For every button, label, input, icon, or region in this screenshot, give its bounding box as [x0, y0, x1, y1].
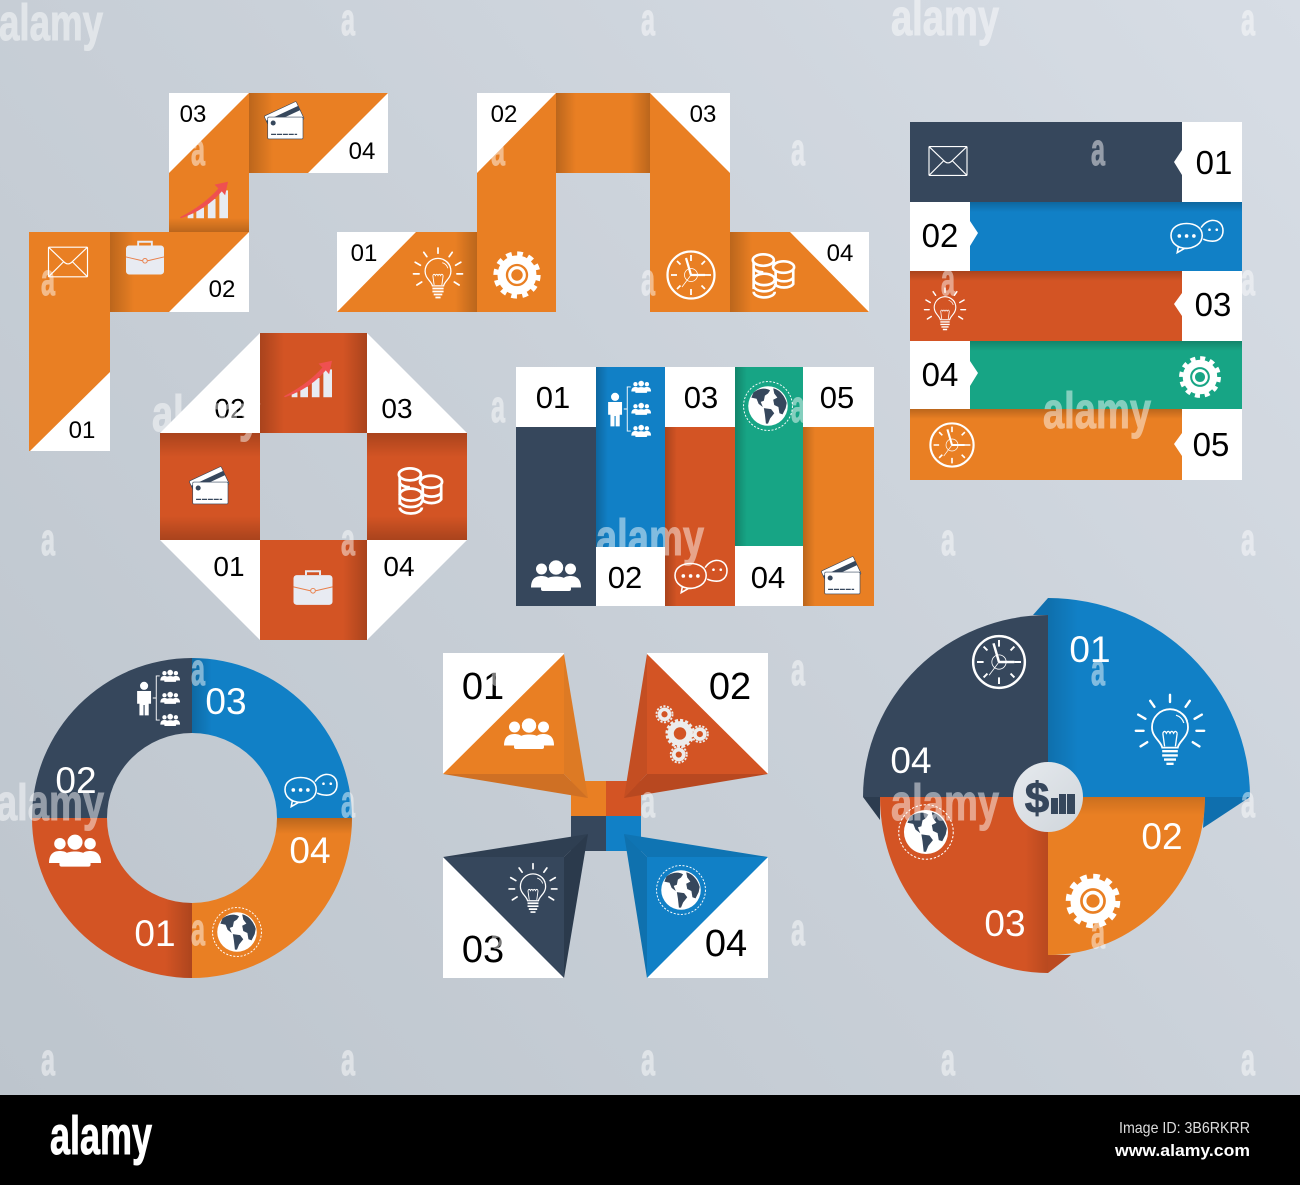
watermarks: a — [341, 514, 356, 565]
footer bar — [0, 1095, 1300, 1185]
watermarks: a — [1091, 644, 1106, 695]
panel: folded pie — [863, 598, 1250, 973]
icon: globe — [657, 866, 705, 914]
icon: clock — [930, 423, 974, 467]
labels: 01 — [462, 666, 504, 708]
icon: chat — [675, 560, 727, 593]
quadrant blue — [192, 658, 352, 818]
labels — [213, 393, 415, 582]
column 05: 05 — [820, 380, 854, 415]
segment 03: 03 — [180, 101, 206, 128]
watermarks: a — [791, 124, 806, 175]
watermarks: a — [41, 254, 56, 305]
icon: briefcase — [294, 571, 332, 605]
triangle blue — [624, 834, 768, 978]
icon: envelope — [48, 247, 88, 277]
centre blocks — [571, 781, 641, 851]
panel: donut chart — [32, 658, 352, 978]
icon: clock — [668, 252, 714, 298]
watermarks: a — [491, 907, 506, 958]
left square — [160, 433, 260, 540]
arch top — [556, 93, 650, 173]
quadrant orange — [1048, 797, 1205, 955]
labels: 03 — [205, 681, 247, 722]
icon: credit cards — [264, 101, 304, 139]
segment 03 — [650, 93, 730, 312]
segment 01: 01 — [69, 417, 95, 444]
column 02 — [596, 367, 665, 606]
bar 04: 04 — [922, 356, 958, 393]
icon: clock — [973, 636, 1025, 688]
watermarks: a — [1241, 514, 1256, 565]
watermarks: a — [1091, 907, 1106, 958]
segment 01 — [337, 232, 477, 312]
segment 04: 04 — [349, 138, 375, 165]
labels: 02 — [709, 666, 751, 708]
icon: gear — [496, 254, 538, 296]
icon: chat — [285, 774, 337, 807]
column 05 — [803, 367, 874, 606]
centre dollar badge — [1013, 762, 1083, 832]
watermarks: a — [491, 381, 506, 432]
centre dollar badge: $ — [1025, 774, 1049, 823]
labels — [462, 666, 751, 971]
icon: globe — [899, 805, 953, 859]
labels: 01 — [1069, 629, 1111, 670]
icon: gears — [656, 706, 708, 763]
labels — [55, 681, 331, 954]
watermarks: alamy — [0, 774, 104, 831]
segment 03 — [169, 93, 249, 232]
icon: briefcase — [126, 242, 164, 274]
icon: globe — [213, 908, 261, 956]
triangle orange — [443, 654, 588, 798]
quadrant navy — [863, 615, 1048, 797]
column 01 — [516, 367, 596, 606]
bar 03 — [910, 271, 1242, 341]
quadrant red — [880, 797, 1048, 973]
watermarks: a — [491, 124, 506, 175]
segment 02 — [110, 232, 249, 312]
right square — [367, 433, 467, 540]
icon: people — [531, 560, 581, 591]
icon: gear — [1068, 876, 1118, 926]
segment 04 — [730, 232, 869, 312]
footer logo: alamy — [50, 1106, 152, 1166]
watermarks: a — [341, 1034, 356, 1085]
icon: credit cards — [821, 556, 861, 594]
panel: five bars — [910, 122, 1242, 480]
labels: 01 — [213, 551, 245, 582]
watermarks: alamy — [1043, 382, 1151, 439]
bar 02: 02 — [922, 217, 958, 254]
watermarks: a — [791, 644, 806, 695]
watermarks: a — [791, 904, 806, 955]
panel: arch ribbon — [337, 93, 869, 312]
watermarks: a — [191, 904, 206, 955]
segment 04: 04 — [827, 240, 853, 267]
watermarks: a — [491, 644, 506, 695]
column 03: 03 — [684, 380, 718, 415]
watermarks: a — [641, 1034, 656, 1085]
fold shadows — [863, 598, 1250, 973]
segment 01: 01 — [351, 240, 377, 267]
icon: people — [49, 835, 101, 867]
watermarks: a — [1241, 776, 1256, 827]
watermarks: a — [41, 514, 56, 565]
website: www.alamy.com — [1114, 1141, 1250, 1160]
segment 02: 02 — [491, 101, 517, 128]
bottom square — [260, 540, 367, 640]
panel: four folded triangles — [443, 653, 768, 978]
watermarks: a — [1241, 1034, 1256, 1085]
icon: people — [504, 718, 554, 749]
icon: growth chart — [180, 182, 228, 218]
segment 01 — [29, 232, 110, 451]
white corner triangles — [160, 333, 467, 640]
labels: 01 — [134, 913, 176, 954]
labels: 02 — [214, 393, 246, 424]
icon: coins — [399, 468, 442, 513]
icon: chat — [1171, 220, 1223, 253]
labels: 03 — [381, 393, 413, 424]
column 04: 04 — [751, 560, 785, 595]
column 04 — [735, 367, 803, 606]
icon: light bulb — [924, 288, 966, 329]
triangle red — [624, 654, 768, 798]
watermarks: a — [1091, 124, 1106, 175]
labels: 04 — [705, 923, 747, 965]
icon: org tree — [137, 670, 180, 726]
labels: 04 — [289, 830, 331, 871]
icon: growth chart — [284, 361, 332, 397]
watermarks: alamy — [152, 385, 260, 442]
watermarks: a — [1241, 254, 1256, 305]
watermarks: alamy — [596, 509, 704, 566]
icon: light bulb — [1136, 695, 1204, 764]
quadrant red — [32, 818, 192, 978]
quadrant orange — [192, 818, 352, 978]
top square — [260, 333, 367, 433]
watermarks: alamy — [891, 774, 999, 831]
image id: Image ID: 3B6RKRR — [1119, 1120, 1250, 1137]
panel: octagon — [160, 333, 467, 640]
segment 04 — [249, 93, 388, 173]
watermarks: a — [641, 254, 656, 305]
icon: globe — [744, 382, 792, 430]
labels: 04 — [383, 551, 415, 582]
bar 02 — [910, 202, 1242, 271]
icon: light bulb — [509, 864, 557, 912]
icon: org tree — [608, 381, 651, 437]
icon: coins — [753, 254, 794, 297]
labels: 03 — [462, 929, 504, 971]
icon: light bulb — [413, 248, 463, 297]
labels: 02 — [1141, 816, 1183, 857]
watermarks: a — [191, 644, 206, 695]
icon: credit cards — [189, 466, 229, 504]
bar 05: 05 — [1193, 426, 1229, 463]
quadrant blue — [1048, 598, 1250, 797]
watermarks: a — [941, 1034, 956, 1085]
panel: five columns — [516, 367, 874, 606]
labels: 02 — [55, 760, 97, 801]
watermarks: a — [941, 514, 956, 565]
segment 02: 02 — [209, 276, 235, 303]
white squares — [443, 653, 768, 978]
bar 05 — [910, 409, 1242, 480]
segment 02 — [477, 93, 556, 312]
labels: 04 — [890, 740, 932, 781]
column 02: 02 — [608, 560, 642, 595]
quadrant navy — [32, 658, 192, 818]
panel: staircase ribbon — [29, 93, 388, 451]
watermarks: a — [341, 776, 356, 827]
labels — [890, 629, 1183, 944]
triangle navy — [443, 834, 588, 978]
labels: 03 — [984, 903, 1026, 944]
bar 01 — [910, 122, 1242, 202]
bar 01: 01 — [1196, 144, 1232, 181]
watermarks: a — [641, 776, 656, 827]
watermarks: a — [941, 254, 956, 305]
column 01: 01 — [536, 380, 570, 415]
column 03 — [665, 367, 735, 606]
watermarks: a — [191, 124, 206, 175]
icon: gear — [1181, 358, 1219, 396]
bar 03: 03 — [1195, 286, 1231, 323]
bar 04 — [910, 341, 1242, 409]
watermarks: a — [791, 381, 806, 432]
watermarks: a — [41, 1034, 56, 1085]
segment 03: 03 — [690, 101, 716, 128]
icon: envelope — [929, 147, 967, 175]
